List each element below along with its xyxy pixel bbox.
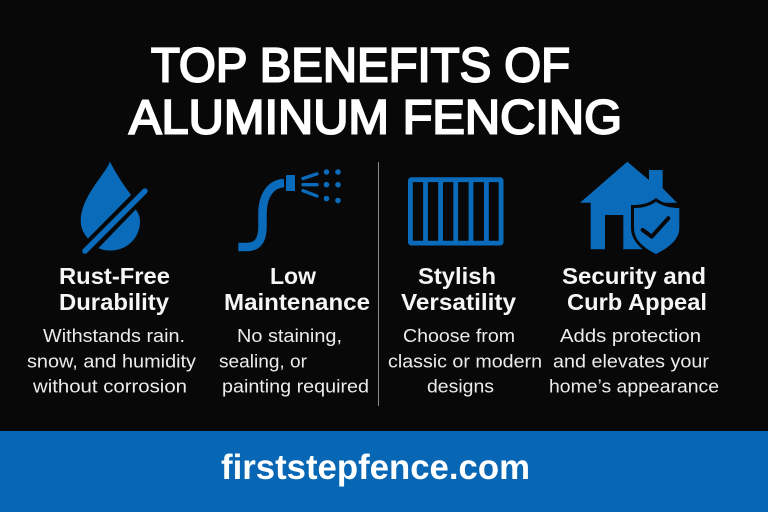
heading: Security and Curb Appeal [562,263,707,315]
panel: low maintenance [219,169,370,396]
description: Security and Curb Appeal: and elevates your [553,352,709,372]
description: Stylish Versatility: classic or modern [388,352,542,372]
heading: Stylish Versatility [401,263,516,315]
heading: Low Maintenance: Low [270,263,316,289]
description: Rust-Free Durability: Withstands rain. [43,326,185,346]
icon: fence panel [410,179,501,244]
heading: Rust-Free Durability: Rust-Free [59,263,170,289]
title [129,40,622,144]
heading: Low Maintenance: Maintenance [224,289,370,315]
description: Security and Curb Appeal [549,326,719,396]
icon: hose with spray [238,169,341,247]
heading: Low Maintenance [224,263,370,315]
panel: rust-free durability [27,162,196,396]
heading: Rust-Free Durability [59,263,170,315]
heading: Rust-Free Durability: Durability [59,289,169,315]
description: Low Maintenance: painting required [222,376,369,396]
description: Stylish Versatility [388,326,542,396]
heading: Stylish Versatility: Versatility [401,289,516,315]
title: ALUMINUM FENCING [129,92,622,144]
panel: stylish versatility [388,179,542,396]
icon: water drop with slash [81,162,145,251]
description: Low Maintenance: No staining, [237,326,342,346]
description: Stylish Versatility: designs [427,376,494,396]
title: TOP BENEFITS OF [151,40,570,92]
heading: Security and Curb Appeal: Curb Appeal [567,289,707,315]
description: Low Maintenance [219,326,369,396]
description: Security and Curb Appeal: Adds protection [560,326,701,346]
heading: Security and Curb Appeal: Security and [562,263,706,289]
description: Rust-Free Durability: snow, and humidity [27,352,196,372]
description: Security and Curb Appeal: home’s appearance [549,376,719,396]
heading: Stylish Versatility: Stylish [418,263,496,289]
description: Stylish Versatility: Choose from [403,326,515,346]
icon: house with shield [580,162,679,254]
description: Low Maintenance: sealing, or [219,352,307,372]
website url: firststepfence.com [221,448,530,487]
description: Rust-Free Durability: without corrosion [32,376,187,396]
footer band [0,431,768,512]
description: Rust-Free Durability [27,326,196,396]
panel: security and curb appeal [549,162,719,396]
